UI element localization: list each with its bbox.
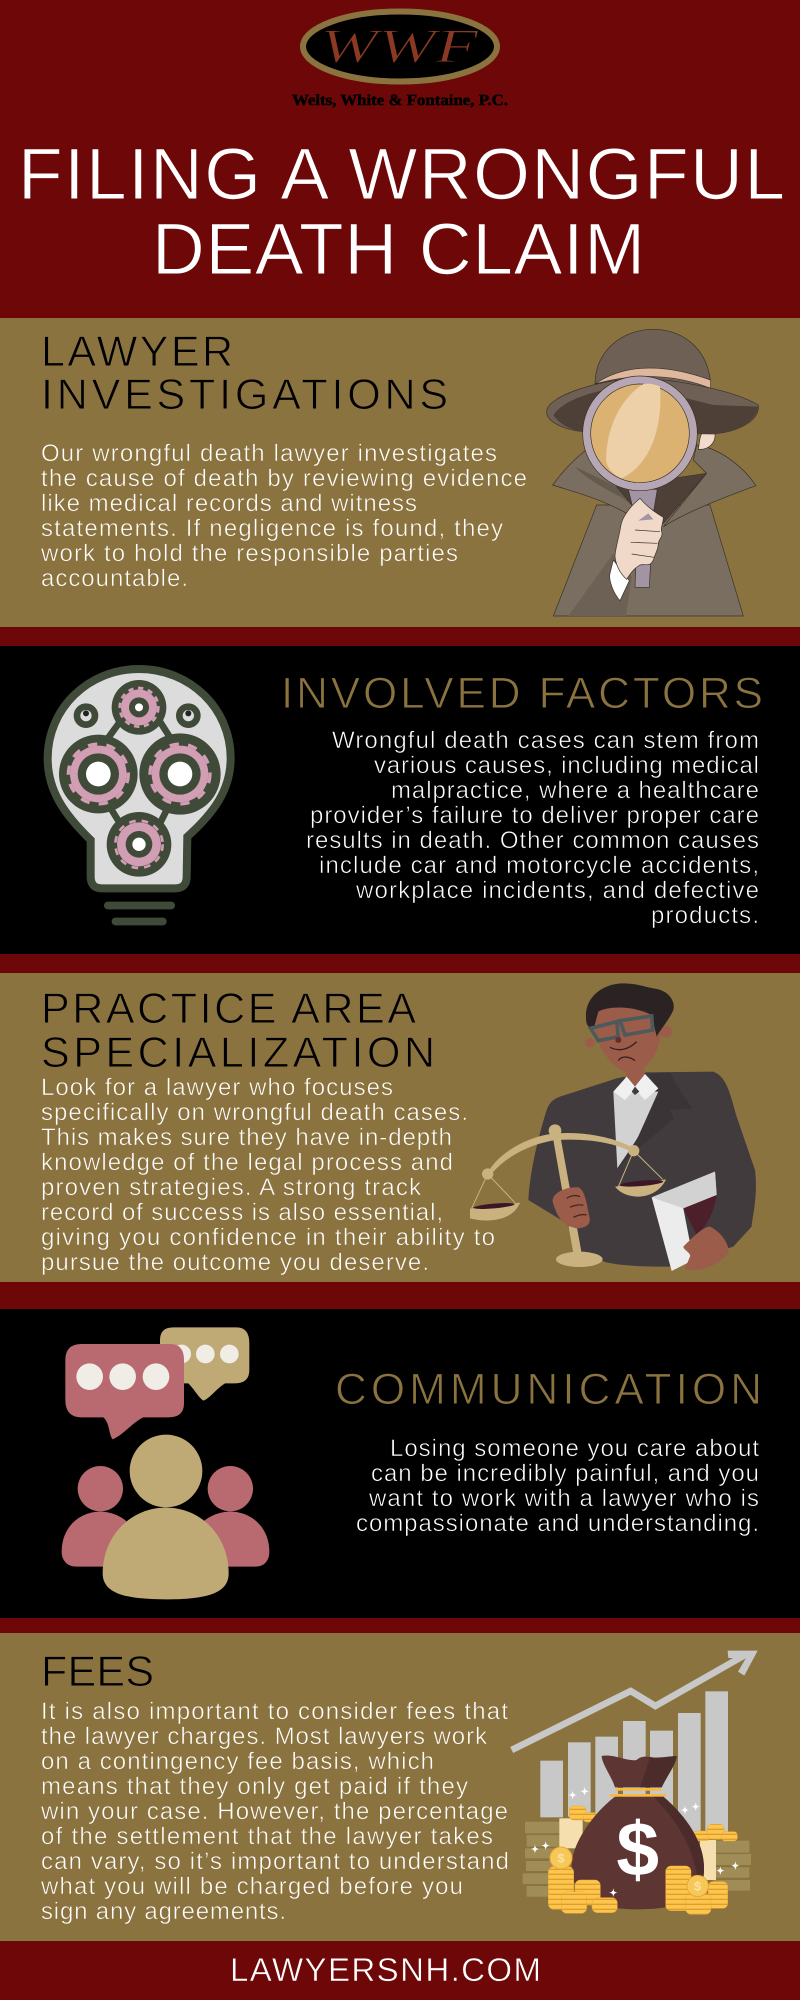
text: involved factors: provider’s failure to deliver proper care <box>310 802 759 829</box>
panel: involved factors <box>0 646 800 954</box>
text: communication: can be incredibly painful, and you <box>371 1460 759 1487</box>
text: communication: Losing someone you care about <box>390 1435 759 1462</box>
panel: lawyer investigations <box>0 318 800 627</box>
text: involved factors: include car and motorcycle accidents, <box>319 852 759 879</box>
heading: involved factors: INVOLVED FACTORS <box>281 669 763 718</box>
text: involved factors: results in death. Other common causes <box>306 827 759 854</box>
logo: Welts, White & Fontaine, P.C. <box>292 92 508 109</box>
logo <box>292 12 508 109</box>
text: fees: sign any agreements. <box>41 1898 286 1925</box>
text: communication <box>356 1435 759 1537</box>
title: FILING A WRONGFUL <box>18 134 785 215</box>
text: fees: the lawyer charges. Most lawyers work <box>41 1723 488 1750</box>
text: lawyer investigations: Our wrongful death lawyer investigates <box>41 440 497 467</box>
icon: light bulb with gears <box>48 669 231 925</box>
text: practice area specialization: This makes sure they have in-depth <box>41 1124 452 1151</box>
footer url: LAWYERSNH.COM <box>230 1951 541 1988</box>
heading: fees: FEES <box>41 1648 154 1696</box>
heading: practice area specialization <box>41 985 435 1077</box>
heading: practice area specialization: SPECIALIZATION <box>41 1029 435 1077</box>
icon: money bag, coins and rising chart: $ <box>557 1852 565 1866</box>
text: fees: win your case. However, the percentage <box>40 1798 508 1825</box>
text: involved factors: products. <box>651 902 759 929</box>
text: communication: compassionate and understanding. <box>356 1510 759 1537</box>
text: practice area specialization: record of success is also essential, <box>41 1199 443 1226</box>
text: lawyer investigations: accountable. <box>41 565 188 592</box>
text: fees <box>40 1698 509 1925</box>
icon: money bag, coins and rising chart <box>512 1651 758 1914</box>
text: practice area specialization: giving you confidence in their ability to <box>41 1224 495 1251</box>
text: fees: of the settlement that the lawyer takes <box>41 1823 493 1850</box>
text: communication: want to work with a lawyer who is <box>368 1485 759 1512</box>
title <box>18 134 785 290</box>
icon: lawyer holding scales and book <box>470 983 756 1271</box>
heading: lawyer investigations <box>41 328 448 419</box>
icon: detective with magnifying glass <box>547 329 758 616</box>
text: lawyer investigations: the cause of death by reviewing evidence <box>41 465 527 492</box>
text: involved factors: malpractice, where a healthcare <box>391 777 759 804</box>
icon: money bag, coins and rising chart: $ <box>616 1806 659 1892</box>
text: lawyer investigations: statements. If negligence is found, they <box>41 515 503 542</box>
text: practice area specialization: Look for a lawyer who focuses <box>41 1074 393 1101</box>
text: involved factors: various causes, including medical <box>374 752 759 779</box>
text: involved factors <box>306 727 759 929</box>
text: practice area specialization: specifically on wrongful death cases. <box>41 1099 468 1126</box>
text: fees: on a contingency fee basis, which <box>41 1748 434 1775</box>
text: practice area specialization: pursue the outcome you deserve. <box>41 1249 429 1276</box>
logo: WWF <box>320 20 479 73</box>
panel: communication <box>0 1309 800 1618</box>
text: practice area specialization <box>41 1074 495 1276</box>
icon: people with speech bubbles <box>62 1327 269 1599</box>
icon: money bag, coins and rising chart: $ <box>694 1880 701 1894</box>
text: fees: what you will be charged before you <box>40 1873 463 1900</box>
heading: lawyer investigations: LAWYER <box>41 328 233 376</box>
text: lawyer investigations: like medical records and witness <box>41 490 417 517</box>
panel: practice area specialization <box>0 973 800 1282</box>
text: practice area specialization: knowledge of the legal process and <box>41 1149 453 1176</box>
text: fees: can vary, so it’s important to understand <box>41 1848 509 1875</box>
text: lawyer investigations: work to hold the responsible parties <box>40 540 458 567</box>
text: fees: means that they only get paid if they <box>41 1773 468 1800</box>
panel: fees <box>0 1633 800 1941</box>
text: involved factors: workplace incidents, and defective <box>355 877 759 904</box>
text: involved factors: Wrongful death cases can stem from <box>332 727 759 754</box>
text: fees: It is also important to consider fees that <box>41 1698 508 1725</box>
heading: communication: COMMUNICATION <box>335 1365 762 1414</box>
title: DEATH CLAIM <box>152 209 645 290</box>
heading: lawyer investigations: INVESTIGATIONS <box>41 371 448 419</box>
text: practice area specialization: proven strategies. A strong track <box>41 1174 422 1201</box>
heading: practice area specialization: PRACTICE AREA <box>41 985 416 1033</box>
text: lawyer investigations <box>40 440 527 592</box>
